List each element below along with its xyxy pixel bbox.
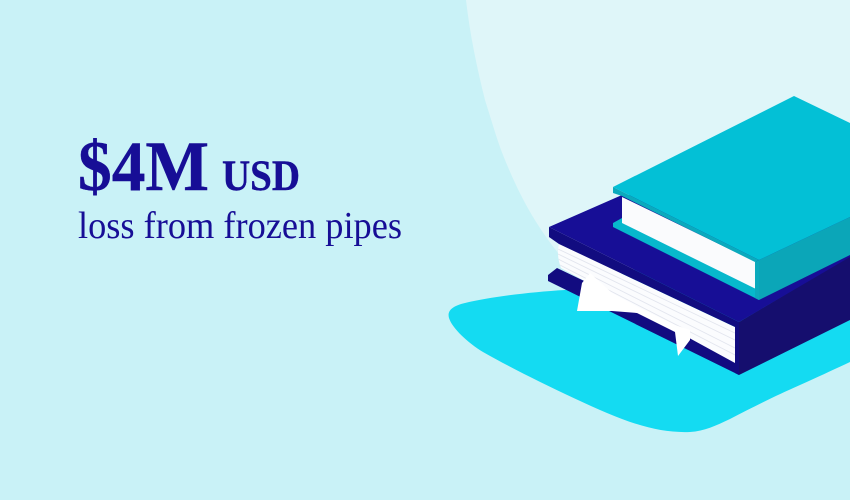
heading: amount — [78, 128, 300, 206]
pale background curve — [466, 0, 850, 300]
bottom book cover — [549, 195, 850, 322]
page lines — [558, 249, 737, 356]
top book spine — [759, 217, 850, 300]
heading: amount: USD — [222, 153, 300, 200]
icon: stack of books — [548, 96, 850, 375]
bottom book spine — [739, 256, 850, 375]
bookmark — [577, 273, 690, 356]
bottom book cover edge — [549, 227, 739, 375]
top book cover — [613, 96, 850, 260]
top book back cover — [613, 218, 759, 300]
heading: amount: $4M — [78, 128, 209, 206]
infographic canvas — [78, 0, 850, 432]
top book spine edge — [755, 260, 759, 300]
top book cover edge — [613, 187, 759, 262]
bottom book back cover — [548, 268, 739, 375]
bottom book pages — [558, 244, 737, 363]
subheading: loss from frozen pipes — [78, 205, 402, 247]
top book pages — [622, 197, 756, 289]
cyan shadow blob — [449, 250, 850, 432]
